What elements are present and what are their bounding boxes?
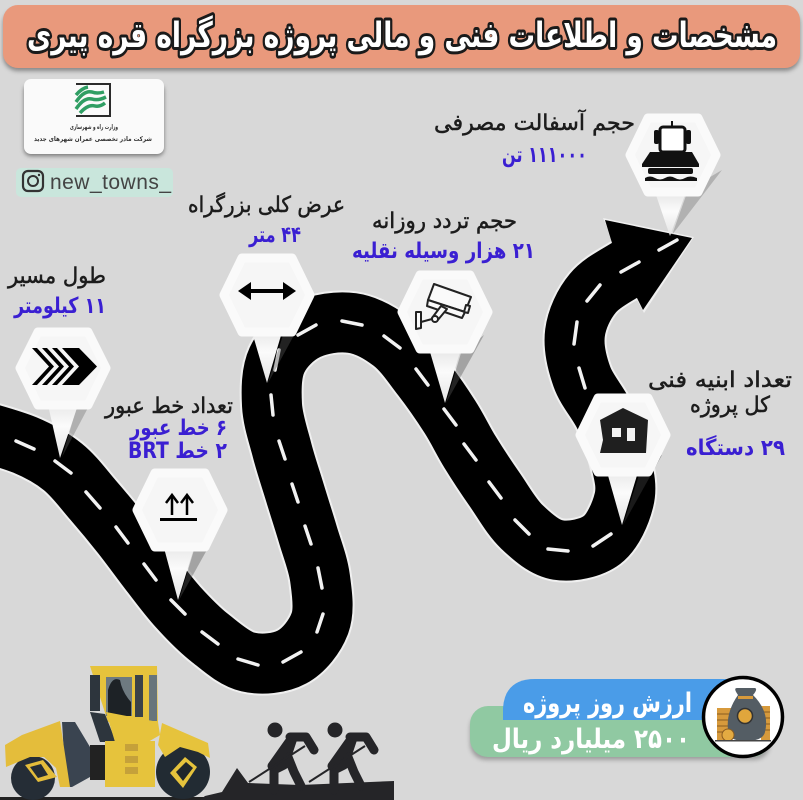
label: technical structures: کل پروژه — [690, 393, 770, 418]
logo card — [24, 79, 164, 156]
label: route length — [7, 264, 106, 319]
label: asphalt used: حجم آسفالت مصرفی — [434, 109, 635, 136]
instagram handle: new_towns_ — [50, 171, 171, 194]
pin: route length chevrons — [20, 332, 106, 458]
label: number of lanes: ۲ خط BRT — [128, 439, 227, 464]
label: daily traffic — [352, 209, 535, 264]
label: asphalt used: ۱۱۱۰۰۰ تن — [502, 143, 587, 168]
project value card — [470, 678, 782, 760]
workers silhouettes — [200, 722, 394, 800]
logo card: وزارت راه و شهرسازی — [70, 123, 118, 131]
label: total width — [188, 192, 345, 248]
label: route length: ۱۱ کیلومتر — [13, 294, 106, 319]
label: daily traffic: حجم تردد روزانه — [372, 209, 517, 234]
title banner — [3, 5, 800, 71]
label: number of lanes — [104, 394, 233, 464]
label: total width: ۴۴ متر — [248, 223, 301, 248]
label: number of lanes: تعداد خط عبور — [104, 394, 233, 419]
label: technical structures: تعداد ابنیه فنی — [648, 368, 792, 393]
label: route length: طول مسیر — [7, 264, 106, 289]
pin: structures house — [580, 398, 666, 525]
road roller machine — [0, 666, 210, 800]
label: asphalt used — [434, 109, 635, 168]
project value card: ارزش روز پروژه — [523, 688, 692, 719]
label: total width: عرض کلی بزرگراه — [188, 192, 345, 218]
project value card: ۲۵۰۰ میلیارد ریال — [492, 724, 690, 755]
pin: asphalt roller — [630, 118, 722, 236]
label: technical structures — [648, 368, 792, 461]
label: technical structures: ۲۹ دستگاه — [686, 434, 785, 461]
label: number of lanes: ۶ خط عبور — [129, 416, 227, 441]
instagram handle — [16, 168, 173, 197]
label: daily traffic: ۲۱ هزار وسیله نقلیه — [352, 239, 535, 264]
pin: traffic camera — [402, 275, 488, 403]
pin: highway width arrow — [224, 258, 310, 383]
pin: lanes arrows — [137, 473, 223, 600]
logo card: شرکت مادر تخصصی عمران شهرهای جدید — [34, 135, 152, 143]
winding road with arrow head — [0, 218, 694, 665]
